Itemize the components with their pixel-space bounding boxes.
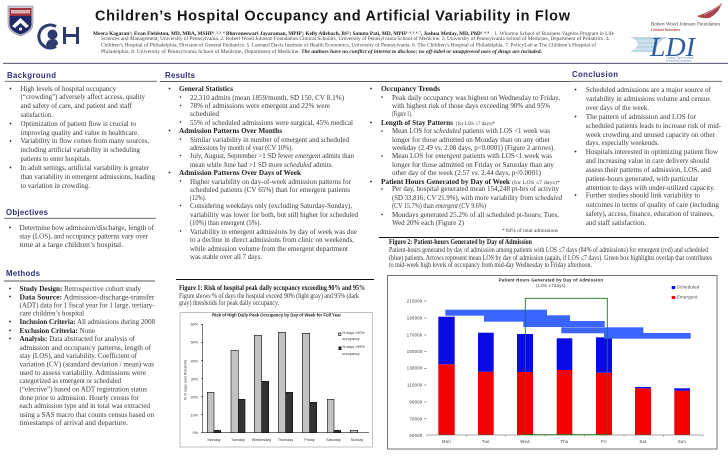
text: background bullets	[20, 84, 155, 190]
text: conclusion: patient-hours generated, with particular	[586, 174, 699, 183]
text: results right column: Per day, hospital generated mean 154,248 pt-hrs of activity	[392, 184, 559, 193]
text: results left column: admissions by month of year (CV 10%).	[190, 143, 293, 152]
chart title: Patient Hours Generated by Day of Admission	[499, 278, 603, 282]
text: conclusion: and staff satisfaction.	[586, 218, 646, 227]
x axis: Fri	[601, 439, 607, 444]
text: methods: used to assess variability. Admissions were	[20, 368, 147, 377]
stacked bar chart: figure 2	[388, 276, 717, 449]
y axis: 210000	[407, 298, 423, 304]
y axis: 10%	[191, 413, 199, 417]
legend: % days >90%	[342, 331, 365, 335]
bullet: objectives	[9, 227, 11, 228]
y axis: 170000	[407, 332, 423, 338]
y axis: 50000	[409, 433, 423, 438]
text: background bullets: Variability in flow comes from many sources,	[20, 136, 149, 145]
x axis: Wed	[520, 439, 530, 444]
title: Children’s Hospital Occupancy and Artificial Variability in Flow	[95, 8, 571, 24]
heading: figure 1: Figure 1: Risk of hospital peak daily occupancy exceeding 90% and 95%	[179, 283, 365, 292]
legend: % days >95%	[342, 345, 365, 349]
chart title: (LOS ≤7days)	[536, 283, 566, 288]
text: results right column: Occupancy Trends	[381, 84, 440, 93]
text: methods: admission and occupancy patterns, length of	[20, 343, 152, 352]
text: background bullets: patients to enter hospitals.	[20, 154, 91, 163]
text: results left column: was stable over all 7 days.	[190, 252, 262, 261]
authors and affiliations: Philadelphia. 8. University of Pennsylvania School of Medicine, Department of Medicine. The authors have no conflict of interest to disclose; no off-label or unapproved uses of drugs are included.	[101, 50, 542, 55]
text: methods: Analysis: Data abstracted for analysis of	[20, 334, 136, 343]
text: conclusion: scheduled patients leads to increase risk of mid-	[586, 121, 722, 130]
y axis: % of days over threshold	[183, 360, 187, 400]
text: methods: categorized as emergent or scheduled	[20, 376, 121, 385]
text: methods: timestamps of arrival and departure.	[20, 418, 128, 427]
text: results right column: (CV 15.7%) than emergent (CV 9.6%)	[392, 201, 486, 210]
text: methods: Exclusion Criteria: None	[20, 326, 96, 335]
text: results left column: 55% of scheduled admissions were surgical, 45% medical	[190, 118, 353, 127]
y axis: 110000	[407, 382, 423, 388]
text: conclusion	[586, 85, 722, 227]
text: results left column: 22,310 admits (mean 1859/month, SD 150, CV 8.1%)	[190, 93, 345, 102]
text: conclusion: Further studies should link variability to	[586, 190, 700, 200]
y axis: 150000	[407, 349, 423, 354]
text: background bullets: than variability in emergent admissions, leading	[20, 172, 155, 181]
text: results right column: Mean LOS for scheduled patients with LOS <1 week was	[392, 126, 550, 135]
legend: Scheduled	[677, 284, 700, 290]
chart title: Risk of High Daily Peak Occupancy by Day of Week for Full Year	[212, 312, 341, 318]
logo: Robert Wood Johnson Foundation: Clinical Scholars	[651, 28, 680, 32]
bars: scheduled	[438, 317, 690, 391]
bar chart: figure 1	[180, 312, 372, 447]
text: background bullets: and safety of care, and patient and staff	[20, 101, 133, 110]
caption: figure 1: gray) thresholds for peak daily occupancy.	[179, 298, 279, 307]
text: conclusion: variability in admissions volume and census	[586, 94, 710, 103]
text: results right column: weekday (2.49 vs. 2.08 days, p<0.0001) (Figure 2 arrows).	[392, 143, 555, 152]
text: results left column: scheduled patients (CV 65%) than for emergent patients	[190, 185, 350, 194]
green box: mid-week overlap	[525, 298, 607, 435]
text: conclusion: assess their patterns of admission, LOS, and	[586, 165, 711, 174]
text: results right column: Mondays generated 25.2% of all scheduled pt-hours; Tues,	[392, 210, 559, 219]
text: conclusion: Hospitals interested in optimizing patient flow	[586, 147, 719, 156]
text: results right column: Wed 20% each (Figure 2)	[392, 218, 465, 227]
text: conclusion: Scheduled admissions are a major source of	[586, 85, 712, 94]
chart title	[499, 278, 603, 288]
text: objectives: stay (LOS), and occupancy patterns vary over	[20, 232, 149, 240]
text: conclusion: The pattern of admission and LOS for	[586, 112, 697, 121]
text: conclusion: and increasing value in care delivery should	[586, 156, 709, 165]
bars: over 90% occupancy	[207, 332, 358, 433]
legend: Emergent	[677, 294, 698, 300]
text: results right column: Peak daily occupancy was highest on Wednesday to Friday,	[392, 93, 560, 102]
heading: figure 2: Figure 2: Patient-hours Generated by Day of Admission	[389, 237, 532, 246]
text: results left column: 78% of admissions were emergent and 22% were	[190, 101, 331, 110]
text: results right column: (for LOS ≤7 days)*	[456, 120, 495, 127]
text: background bullets: High levels of hospital occupancy	[20, 84, 116, 93]
bars: emergent	[438, 364, 690, 435]
y axis: 60%	[191, 323, 199, 327]
logo: LDI	[630, 32, 697, 62]
bullets: background	[10, 88, 11, 168]
text: methods: done prior to admission. Hourly census for	[20, 393, 140, 402]
x axis labels: Saturday	[326, 438, 341, 442]
text: results right column: Patient Hours Generated by Day of Week	[381, 177, 511, 186]
text: results left column: (12%).	[190, 193, 206, 202]
logo: LDI: Leonard Davis Institute	[666, 56, 695, 60]
text: results left column: (10%) than emergent (5%).	[190, 218, 261, 227]
text: methods: stay (LOS), and variability. Coefficient of	[20, 351, 138, 360]
x axis labels: Tuesday	[231, 438, 245, 442]
bullets: results left column	[169, 88, 181, 232]
caption: figure 1: Figure shows % of days the hospital exceed 90% (light gray) and 95% (dark	[179, 291, 359, 300]
heading: conclusion: Conclusion	[572, 70, 618, 79]
bullets: conclusion	[575, 89, 576, 196]
text: results left column: mean while June had >1 SD more scheduled admits.	[190, 160, 333, 169]
text: results right column: Length of Stay Patterns	[381, 118, 453, 127]
text: conclusion: week crowding and unused capacity on other	[586, 130, 716, 139]
text: background bullets: (“crowding”) adversely affect access, quality	[20, 92, 145, 101]
text: results left column: Admission Patterns Over Months	[179, 126, 282, 135]
text: background bullets: improving quality and value in healthcare.	[20, 128, 139, 137]
text: results right column	[381, 84, 562, 234]
x axis labels	[207, 438, 363, 442]
authors and affiliations: Children’s Hospital of Philadelphia, Division of General Pediatrics. 5. Leonard Davis Institute of Health Economics, University of Pennsylvania. 6. The Children’s Hospital of Philadelphia. 7. PolicyLab at The Children’s Hospital of	[101, 43, 596, 48]
text: methods	[20, 284, 155, 427]
text: results left column: Considering weekdays only (excluding Saturday-Sunday),	[190, 201, 352, 210]
panel: figure 2	[388, 237, 717, 449]
text: methods: (ADT) data for 1 fiscal year for 1 large, tertiary-	[20, 300, 155, 309]
text: results right column: (Figure 1).	[392, 109, 412, 118]
y axis: 130000	[407, 366, 423, 371]
text: results left column: Admission Patterns Over Days of Week	[179, 168, 302, 177]
y axis: 0%	[193, 431, 199, 435]
x axis: Tue	[482, 439, 490, 444]
logo: Children's Hospital	[39, 25, 78, 48]
caption: figure 2	[389, 245, 712, 269]
text: results left column: July, August, September >1 SD fewer emergent admits than	[190, 151, 354, 160]
x axis labels: Thursday	[278, 438, 293, 442]
arrows: mean length of stay	[445, 310, 691, 339]
authors and affiliations: Meera Kagaran¹; Evan Fieldston, MD, MBA, MSHP¹˒²˒³˒⁴ Bhuvaneswari Jayaraman, MPH⁵; Kelly Allebach, BS⁵; Sanuta Pati, MD, MPH³˒⁴˒⁵˒⁶˒⁷, Joshua Metlay, MD, PhD³˒⁴˒⁸ 1. Wharton School of Business Vagelos Program in Life	[93, 31, 614, 37]
y axis	[183, 323, 369, 435]
text: results left column: to a decline in direct admissions from clinic on weekends,	[190, 235, 354, 244]
text: results right column: longer for those admitted on Friday or Saturday than any	[392, 160, 554, 169]
y axis: 70000	[409, 416, 423, 422]
text: conclusion: outcomes in terms of quality of care (including	[586, 200, 719, 209]
bullets: results right column	[370, 88, 383, 215]
text: background bullets: including artificial variability in scheduling	[20, 145, 140, 154]
text: results left column: Variability in emergent admissions by day of week was due	[190, 227, 358, 236]
text: results left column: Higher variability on day-of-week admission patterns for	[190, 177, 351, 186]
logo: LDI: of Health Economics	[666, 60, 692, 62]
heading: background: Background	[7, 71, 56, 80]
caption: figure 1	[179, 291, 359, 307]
text: results right column: longer for those admitted on Monday than on any other	[392, 135, 551, 144]
text: methods: Study Design: Retrospective cohort study	[20, 284, 141, 293]
heading: results: Results	[165, 71, 196, 80]
text: conclusion: attention to days with under-utilized capacity.	[586, 183, 715, 192]
x axis labels: Wednesday	[252, 438, 271, 442]
legend	[338, 331, 365, 356]
bars: over 95% occupancy	[214, 381, 341, 433]
text: methods: care children’s hospital	[20, 308, 84, 317]
x axis	[427, 435, 703, 444]
y axis: 40%	[191, 359, 199, 363]
text: background bullets: In adult settings, artificial variability is greater	[20, 163, 149, 172]
panel: objectives	[4, 208, 156, 249]
x axis labels: Friday	[304, 438, 315, 442]
panel: methods	[4, 269, 155, 427]
text: results right column: other day of the week (2.57 vs. 2.44 days, p<0.0001)	[392, 168, 542, 177]
text: background bullets: satisfaction.	[20, 110, 53, 119]
legend	[672, 284, 700, 300]
y axis: 190000	[407, 316, 423, 320]
text: results left column	[179, 84, 358, 261]
panel: figure 1	[179, 283, 372, 447]
y axis: 50%	[191, 341, 199, 345]
text: methods: Inclusion Criteria: All admissions during 2008	[20, 317, 155, 326]
heading: objectives: Objectives	[6, 208, 49, 217]
text: methods: variation (CV) (standard deviation / mean) was	[20, 359, 154, 368]
y axis: 30%	[191, 377, 199, 381]
text: results right column: (SD 33,816; CV 21.9%), with more variability from scheduled	[392, 193, 562, 202]
text: results right column: with highest risk of those days exceeding 90% and 95%	[392, 101, 550, 110]
text: background bullets: to variation in crowding.	[20, 181, 90, 190]
logo: Robert Wood Johnson Foundation: Robert Wood Johnson Foundation	[651, 22, 720, 28]
text: methods: Data Source: Admission-discharge-transfer	[20, 292, 155, 301]
text: methods: each admission type and in total was extracted	[20, 401, 150, 410]
text: results left column: variability was lower for both, but still higher for scheduled	[190, 210, 358, 219]
x axis labels: Sunday	[351, 438, 363, 442]
text: results right column: (for LOS ≤7 days)*	[512, 179, 560, 186]
authors and affiliations: Sciences and Management, University of Pennsylvania. 2. Robert Wood Johnson Foundation Clinical Scholars, University of Pennsylvania School of Medicine. 3. University of Pennsylvania School of Medicine, Department of Pediatrics. 4.	[101, 37, 610, 42]
text: methods: using a SAS macro that counts census based on	[20, 410, 154, 419]
x axis: Sun	[678, 439, 687, 444]
caption: figure 2: to mid-week high levels of occupancy from mid-day Wednesday to Friday afternoon.	[389, 260, 592, 269]
text: results right column: Mean LOS for emergent patients with LOS<1 week was	[392, 151, 552, 160]
legend: occupancy	[342, 337, 360, 341]
text: conclusion: days, especially weekends.	[586, 138, 659, 147]
text: conclusion: over days of the week.	[586, 103, 649, 112]
text: objectives: Determine how admission/discharge, length of	[20, 223, 155, 232]
bullets: methods	[9, 288, 11, 339]
text: background bullets: Optimization of patient flow is crucial to	[20, 119, 136, 128]
header	[3, 3, 728, 63]
legend: occupancy	[342, 352, 360, 356]
text: results left column: Similar variability in number of emergent and scheduled	[190, 135, 349, 144]
text: results left column: scheduled	[190, 109, 219, 118]
x axis: Thu	[560, 439, 569, 444]
text: objectives: time at a large children’s hospital.	[20, 240, 123, 249]
logo: Penn shield	[8, 6, 33, 36]
x axis labels: Monday	[207, 438, 221, 442]
panel: results	[160, 71, 570, 261]
text: conclusion: safety), access, finance, education of trainees,	[586, 209, 714, 218]
text: results left column: General Statistics	[179, 84, 233, 93]
authors and affiliations	[93, 31, 614, 55]
logo: LDI: LDI	[649, 32, 697, 62]
y axis: 20%	[191, 395, 199, 399]
logo: Robert Wood Johnson Foundation	[651, 3, 722, 32]
text: results left column: while admission volume from the emergent department	[190, 244, 349, 253]
text: results right column: * 84% of total admissions	[502, 229, 558, 234]
x axis: Mon	[442, 439, 451, 444]
panel: conclusion	[570, 70, 722, 227]
y axis: 90000	[409, 400, 423, 404]
y axis	[407, 298, 427, 438]
text: methods: (“elective”) based on ADT registration status	[20, 384, 147, 393]
text: objectives	[20, 223, 155, 249]
heading: methods: Methods	[6, 269, 41, 278]
x axis: Sat	[639, 439, 647, 444]
panel: background	[5, 71, 157, 190]
